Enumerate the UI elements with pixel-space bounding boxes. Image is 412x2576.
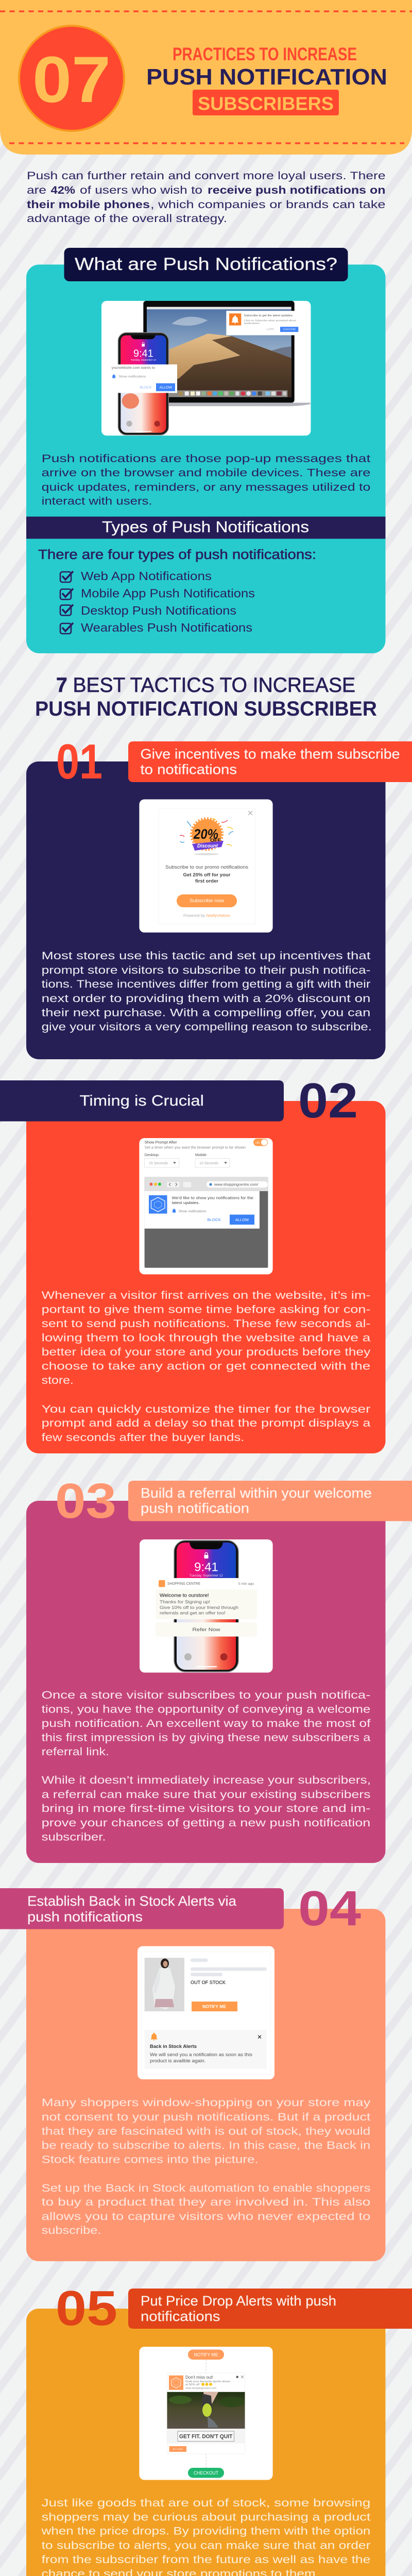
dialog: browser allow prompt: Show notifications: [119, 376, 146, 379]
intro paragraph: their mobile phones: [27, 199, 150, 211]
list: notification types: [60, 569, 255, 634]
text: definition: interact with users.: [42, 495, 152, 507]
text: four types lead-in: There are four types of push notifications:: [38, 548, 316, 562]
text: tactic 03 body: subscriber.: [42, 1831, 106, 1843]
dialog: browser allow prompt: ALLOW: [159, 386, 172, 389]
icon: 20% off burst: [180, 818, 233, 855]
pill: checkout: CHECKOUT: [194, 2470, 218, 2476]
notification card: 5 min ago: [238, 1582, 254, 1586]
text: tactic 02 body: few seconds after the buyer lands.: [42, 1432, 244, 1444]
text: tactic 01 body: [42, 950, 372, 1033]
banner: tactic 04 title: Establish Back in Stock Alerts via: [27, 1893, 237, 1909]
image: back in stock alert: OUT OF STOCK: [191, 1980, 226, 1986]
notification card: [167, 2373, 245, 2454]
text: tactic 05 body: Just like goods that are out of stock, some browsing: [42, 2497, 370, 2509]
title: SUBSCRIBERS: [198, 93, 334, 114]
intro paragraph: 42%: [50, 184, 75, 196]
browser window: We'd like to show you notifications for the: [172, 1195, 253, 1200]
text: tactic 02 body: prompt and add a delay so that the prompt displays a: [42, 1417, 371, 1429]
text: tactic 02 body: store.: [42, 1375, 74, 1386]
panel: what are push notifications: [26, 248, 385, 653]
title: PUSH NOTIFICATION: [146, 64, 387, 90]
heading: what are push notifications: [64, 248, 348, 281]
title: [146, 44, 387, 115]
text: tactic 01 body: prompt store visitors to subscribe to their push notifica-: [42, 964, 370, 976]
notification card: BUY NOW: [173, 2448, 183, 2450]
image: back in stock alert: NOTIFY ME: [202, 2004, 227, 2009]
image: discount popup: Subscribe to our promo notifications: [165, 865, 248, 870]
text: tactic 03 body: this first impression is by giving these new subscribers a: [42, 1732, 371, 1744]
phone: Tuesday, September 12: [131, 359, 156, 361]
image: discount popup: Powered by NotifyVisitors: [183, 913, 230, 918]
notification card: Give 10% off to your friend through: [160, 1605, 238, 1610]
text: tactic 04 body: [42, 2096, 371, 2236]
text: tactic 03 body: bring in more first-time visitors to your store and im-: [42, 1803, 370, 1815]
text: tactic 03 body: tions, you have the opportunity of conveying a welcome: [42, 1703, 370, 1716]
text: tactic 03 body: prove your chances of getting a new push notification: [42, 1817, 370, 1829]
banner: tactic 03 title: [128, 1481, 412, 1521]
panel: tactic 03: [26, 1473, 412, 1863]
dialog: browser allow prompt: BLOCK: [140, 386, 151, 389]
text: tactic 04 body: Stock feature comes into the picture.: [42, 2153, 259, 2165]
alert panel: We will send you a notification as soon as this: [150, 2052, 253, 2057]
intro paragraph: Push can further retain and convert more loyal users. There: [27, 170, 385, 182]
icon: 20% off burst: OFF: [210, 838, 221, 843]
number 05: 05: [56, 2281, 117, 2336]
text: tactic 05 body: [41, 2497, 370, 2576]
image: back in stock alert: [138, 1946, 274, 2079]
popup: subscribe: LATER: [267, 328, 274, 331]
dialog: browser allow prompt: yourwebsite.com wants to: [112, 366, 155, 370]
text: tactic 01 body: their next purchase. With a compelling offer, you can: [42, 1007, 370, 1019]
header banner: [0, 0, 412, 155]
text: definition: Push notifications are those pop-up messages that: [42, 452, 370, 465]
text: tactic 04 body: to buy a product that they are involved in. This also: [42, 2196, 370, 2208]
banner: tactic 03 title: Build a referral within your welcome: [141, 1485, 372, 1501]
item: web app: Web App Notifications: [81, 569, 212, 583]
heading: 7 best tactics: [35, 674, 377, 720]
intro paragraph: of users who wish to: [80, 184, 202, 196]
panel: tactic 01: [26, 734, 412, 1059]
notification card: Don't miss out!: [185, 2375, 213, 2380]
intro paragraph: [27, 170, 385, 225]
notification card: referrals and get an offer too!: [160, 1611, 226, 1616]
panel: tactic 05: [26, 2281, 412, 2576]
heading: types of push notifications: Types of Push Notifications: [102, 518, 309, 536]
text: tactic 04 body: allows you to capture visitors who never expected to: [42, 2210, 370, 2223]
intro paragraph: , which companies or brands can take: [150, 199, 385, 211]
popup: subscribe: Click on Subscribe when prompted about: [244, 319, 296, 322]
image: prompt timer settings: Desktop: [145, 1153, 159, 1157]
image: referral notification on phone: [140, 1539, 273, 1672]
image: laptop and phone with notification prompts: [101, 301, 311, 436]
image: discount popup: first order: [195, 878, 219, 884]
popup: subscribe: Notifications.: [244, 322, 260, 325]
text: tactic 03 body: [42, 1689, 371, 1843]
photo: runner shoe: [167, 2392, 245, 2429]
intro paragraph: advantage of the overall strategy.: [27, 213, 227, 225]
banner: tactic 03 title: push notification: [141, 1501, 249, 1516]
text: tactic 04 body: subscribe.: [42, 2224, 101, 2236]
text: tactic 03 body: push notification. An excellent way to make the most of: [42, 1718, 371, 1730]
notification card: at 50% off: [185, 2383, 200, 2386]
dialog: browser allow prompt: [109, 364, 177, 393]
text: definition: arrive on the browser and mobile devices. These are: [42, 467, 370, 479]
notification card: Welcome to ourstore!: [160, 1593, 209, 1598]
popup: subscribe: Subscribe to get the latest updates.: [244, 314, 293, 317]
image: prompt timer settings: [139, 1138, 273, 1275]
text: tactic 02 body: portant to give them some time before asking for con-: [42, 1303, 370, 1316]
notification card: GET FIT. DON'T QUIT: [179, 2434, 233, 2440]
intro paragraph: receive push notifications on: [208, 184, 385, 196]
phone: [118, 333, 168, 435]
text: tactic 05 body: when the price drops. By providing them with the option: [41, 2525, 370, 2537]
item: desktop: Desktop Push Notifications: [81, 604, 236, 617]
browser window: Show notifications: [179, 1210, 207, 1213]
text: tactic 04 body: not consent to your push notifications. But if a product: [42, 2111, 370, 2123]
text: tactic 04 body: Set up the Back in Stock automation to enable shoppers: [42, 2182, 370, 2194]
banner: tactic 02 title: Timing is Crucial: [80, 1093, 204, 1109]
number 03: 03: [55, 1473, 116, 1529]
browser window: latest updates.: [172, 1200, 200, 1205]
button: refer now: [156, 1622, 257, 1636]
browser window: BLOCK: [207, 1217, 221, 1222]
text: tactic 03 body: a referral can make sure that your existing subscribers: [42, 1789, 370, 1801]
text: tactic 03 body: referral link.: [42, 1746, 109, 1758]
item: mobile app: Mobile App Push Notifications: [81, 586, 255, 600]
text: tactic 02 body: Whenever a visitor first arrives on the website, it’s im-: [42, 1290, 370, 1301]
number 04: 04: [298, 1881, 361, 1936]
text: tactic 02 body: better idea of your store and your products before they: [42, 1346, 371, 1358]
notification card: Grab your favourite sports shoes: [185, 2380, 230, 2383]
heading: types of push notifications: [26, 517, 385, 539]
image: discount popup: Get 20% off for your: [183, 872, 231, 878]
notification card: www.shoppingcentre.com: [185, 2387, 216, 2390]
image: price drop flow: [139, 2347, 273, 2480]
image: prompt timer settings: Set a timer when you want the browser prompt to be shown: [145, 1145, 246, 1150]
photo: model in dress: [145, 1958, 184, 2011]
image: prompt timer settings: Show Prompt After: [145, 1140, 177, 1144]
alert panel: product is availble again.: [150, 2058, 206, 2063]
intro paragraph: are: [27, 184, 46, 196]
browser window: [145, 1177, 268, 1268]
banner: tactic 04 title: [0, 1888, 284, 1929]
text: tactic 01 body: next order to providing them with a 20% discount on: [42, 993, 370, 1005]
text: tactic 01 body: give your visitors a very compelling reason to subscribe.: [42, 1021, 372, 1033]
alert panel: [145, 2030, 267, 2069]
toggle: [253, 1139, 268, 1146]
number 01: 01: [56, 734, 102, 789]
text: tactic 03 body: While it doesn’t immediately increase your subscribers,: [42, 1774, 371, 1786]
text: tactic 05 body: to subscribe to alerts, you can make sure that an order: [42, 2539, 370, 2551]
item: wearables: Wearables Push Notifications: [81, 621, 252, 634]
text: tactic 04 body: that they are fascinated with is out of stock, they would: [42, 2125, 370, 2137]
alert panel: Back in Stock Alerts: [150, 2044, 197, 2049]
banner: tactic 05 title: notifications: [141, 2309, 220, 2324]
image: prompt timer settings: 10 Seconds: [199, 1162, 218, 1165]
image: prompt timer settings: Mobile: [195, 1153, 207, 1157]
badge: 07: 07: [32, 43, 111, 116]
text: tactic 03 body: Once a store visitor subscribes to your push notifica-: [42, 1689, 370, 1701]
text: definition: quick updates, reminders, or any messages utilized to: [42, 481, 370, 494]
image: discount popup: Subscribe now: [190, 898, 224, 904]
banner: tactic 01 title: [128, 741, 412, 782]
title: PRACTICES TO INCREASE: [173, 44, 357, 64]
notification card: SHOPPING CENTRE: [167, 1582, 200, 1586]
text: tactic 02 body: [42, 1290, 371, 1444]
browser window: www.shoppingcentre.com/: [214, 1182, 259, 1187]
banner: tactic 04 title: push notifications: [27, 1909, 143, 1925]
image: discount popup: [139, 800, 273, 933]
banner: tactic 01 title: to notifications: [140, 761, 237, 777]
pill: checkout: [188, 2468, 224, 2478]
banner: tactic 02 title: [0, 1080, 284, 1121]
text: tactic 05 body: from the subscriber from the future as well as have the: [42, 2553, 370, 2566]
icon: 20% off burst: 20%: [193, 826, 218, 842]
text: definition: [42, 452, 370, 507]
popup: subscribe: [226, 311, 302, 335]
panel: tactic 02: [0, 1073, 385, 1453]
notification card: Thanks for Signing up!: [160, 1599, 210, 1604]
badge: 07: [18, 25, 125, 132]
text: tactic 04 body: Many shoppers window-shopping on your store may: [42, 2096, 371, 2109]
heading: 7 best tactics: 7 BEST TACTICS TO INCREASE: [56, 674, 355, 697]
text: tactic 02 body: choose to take any action or get connected with the: [42, 1361, 370, 1372]
heading: what are push notifications: What are Push Notifications?: [75, 255, 337, 274]
notification card: [156, 1578, 257, 1619]
text: tactic 05 body: shoppers may be curious about purchasing a product: [42, 2511, 370, 2523]
panel: tactic 04: [0, 1881, 385, 2261]
banner: tactic 05 title: Put Price Drop Alerts with push: [141, 2293, 336, 2309]
text: tactic 02 body: lowing them to look through the website and have a: [42, 1332, 371, 1344]
popup: subscribe: SUBSCRIBE: [283, 328, 296, 331]
banner: tactic 01 title: Give incentives to make them subscribe: [140, 746, 400, 761]
image: prompt timer settings: 15 Seconds: [149, 1162, 168, 1165]
pill: notify me: NOTIFY ME: [194, 2352, 218, 2357]
text: tactic 02 body: You can quickly customize the timer for the browser: [42, 1403, 370, 1415]
text: tactic 04 body: be ready to subscribe to alerts. In this case, the Back in: [42, 2139, 370, 2151]
text: tactic 01 body: Most stores use this tactic and set up incentives that: [42, 950, 371, 962]
toggle: ON: [255, 1142, 260, 1145]
banner: tactic 05 title: [128, 2289, 412, 2329]
pill: notify me: [188, 2349, 224, 2360]
button: refer now: Refer Now: [193, 1627, 220, 1633]
phone: 9:41: [133, 348, 153, 359]
image: referral notification on phone: Tuesday, September 12: [190, 1574, 223, 1578]
text: tactic 01 body: tions. These incentives differ from getting a gift with their: [42, 978, 370, 990]
browser window: ALLOW: [235, 1217, 249, 1222]
icon: 20% off burst: Discount: [197, 843, 218, 849]
text: tactic 02 body: sent to send push notifications. These few seconds al-: [42, 1318, 370, 1330]
image: referral notification on phone: 9:41: [194, 1560, 218, 1574]
heading: 7 best tactics: PUSH NOTIFICATION SUBSCRIBER: [35, 698, 377, 720]
number 02: 02: [298, 1073, 358, 1128]
